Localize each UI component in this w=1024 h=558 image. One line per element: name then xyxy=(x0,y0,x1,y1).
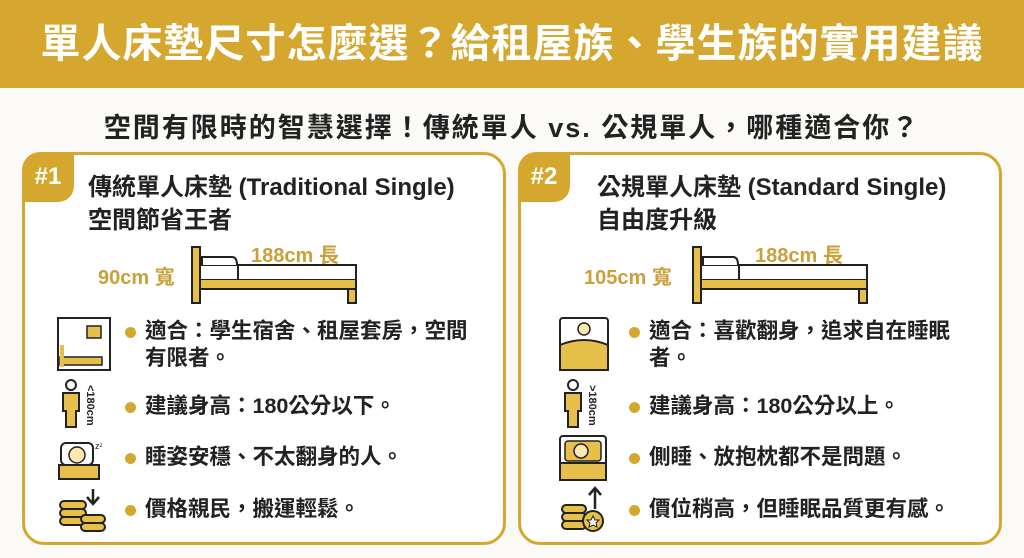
badge #2 xyxy=(518,152,570,202)
panel title xyxy=(88,174,455,234)
text: suitable: 適合：學生宿舍、租屋套房，空間 xyxy=(145,319,468,343)
icon: height: <180cm xyxy=(84,385,96,426)
panel title: 傳統單人床墊 (Traditional Single) xyxy=(88,174,455,201)
badge #1 xyxy=(22,152,74,202)
text: suitable: 有限者。 xyxy=(145,346,231,370)
text: suitable: 者。 xyxy=(649,346,692,370)
length label: 188cm 長 xyxy=(755,245,843,267)
panel title xyxy=(597,174,946,234)
icon: coins down xyxy=(59,489,106,532)
icon: bed xyxy=(692,246,868,304)
icon: bed xyxy=(191,246,357,304)
text: sleep: 睡姿安穩、不太翻身的人。 xyxy=(145,445,403,469)
length label: 188cm 長 xyxy=(251,245,339,267)
text: suitable: 適合：喜歡翻身，追求自在睡眠 xyxy=(649,319,950,343)
text: side sleep: 側睡、放抱枕都不是問題。 xyxy=(649,445,907,469)
text: suitable xyxy=(629,318,950,372)
icon: sleeper xyxy=(58,441,103,480)
icon: coins up xyxy=(561,486,604,532)
width label: 90cm 寬 xyxy=(98,267,175,289)
title xyxy=(0,0,1024,88)
width label: 105cm 寬 xyxy=(584,267,672,289)
icon: height xyxy=(564,379,598,428)
text: height: 建議身高：180公分以下。 xyxy=(145,394,396,418)
text: suitable xyxy=(125,318,468,372)
icon: height xyxy=(62,379,96,428)
icon: room xyxy=(57,317,111,371)
panel title: 空間節省王者 xyxy=(88,207,232,234)
text: height: 建議身高：180公分以上。 xyxy=(649,394,900,418)
icon: free sleeper xyxy=(559,317,609,371)
icon: side sleeper xyxy=(559,435,607,481)
icon: height: >180cm xyxy=(586,385,598,426)
title: 單人床墊尺寸怎麼選？給租屋族、學生族的實用建議 xyxy=(40,22,984,66)
panel: standard single xyxy=(518,152,1002,545)
text: price: 價位稍高，但睡眠品質更有感。 xyxy=(649,497,950,521)
badge #1: #1 xyxy=(35,163,61,190)
subtitle: 空間有限時的智慧選擇！傳統單人 vs. 公規單人，哪種適合你？ xyxy=(104,113,920,143)
panel title: 公規單人床墊 (Standard Single) xyxy=(597,174,946,201)
icon: sleeper: zᶻ xyxy=(95,441,103,451)
text: price: 價格親民，搬運輕鬆。 xyxy=(145,497,360,521)
badge #2: #2 xyxy=(531,163,557,190)
panel: traditional single xyxy=(22,152,506,545)
panel title: 自由度升級 xyxy=(597,207,717,234)
